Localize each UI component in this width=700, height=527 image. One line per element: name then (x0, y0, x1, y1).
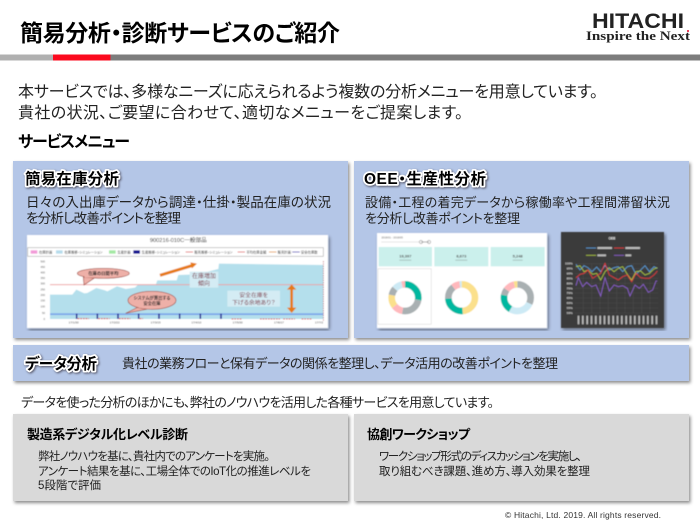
y axis labels: 300 (41, 282, 46, 286)
x axis labels: 17/4/10 (191, 321, 202, 325)
label: rising stock: 在庫増加 (192, 272, 216, 280)
logo: Hitachi (586, 10, 691, 43)
description: workshop: 取り組むべき課題、進め方、導入効果を整理 (379, 464, 590, 478)
label: rising stock (190, 272, 218, 288)
callout: safety stock: システムが算出する (134, 294, 170, 301)
y axis labels: 350 (41, 276, 46, 280)
x axis labels: 17/3/15 (151, 321, 161, 325)
safety stock line (50, 313, 323, 315)
description: data analysis: 貴社の業務フローと保有データの関係を整理し、データ活用の改善ポイントを整理 (122, 356, 558, 371)
average line (50, 283, 323, 286)
chart: OEE line chart: 100% (565, 262, 573, 266)
y axis labels: 50 (42, 311, 46, 315)
arrow: double headed (287, 284, 296, 313)
label: room to reduce safety stock: 安全在庫を (239, 291, 269, 299)
description: workshop (379, 449, 590, 478)
panel: co-creation workshop (354, 414, 689, 501)
description: OEE: を分析し改善ポイントを整理 (365, 211, 520, 226)
label: room to reduce safety stock: 下げる余地あり？ (232, 299, 275, 307)
x axis labels (69, 321, 323, 325)
y axis labels: 450 (41, 265, 46, 269)
chart legend: 販売推移・シミュレーション (194, 250, 233, 255)
y axis labels (41, 260, 46, 321)
copyright: © Hitachi, Ltd. 2019. All rights reserved. (505, 510, 661, 520)
area: inventory (50, 264, 323, 319)
label: room to reduce safety stock (227, 291, 280, 307)
chart legend: 平均在庫金額 (246, 250, 267, 255)
intro text: 貴社の状況、ご要望に合わせて、適切なメニューをご提案します。 (18, 104, 463, 122)
text: other services intro: データを使った分析のほかにも、弊社のノウハウを活用した各種サービスを用意しています。 (21, 395, 494, 410)
heading: data analysis: データ分析 (25, 354, 97, 373)
chart legend: 生産計画 (117, 250, 131, 255)
arrow: upward trend (160, 262, 197, 275)
date slider (381, 236, 431, 244)
series lines (576, 263, 657, 296)
callout: average stock: 在庫の日間平均 (88, 270, 119, 277)
sales marks (78, 317, 312, 320)
callout: safety stock: 安全在庫 (143, 300, 161, 307)
KPI cards: 5,248 (513, 253, 523, 258)
x axis labels: 17/6/17 (274, 321, 284, 325)
grid and axis (575, 264, 658, 313)
y axis labels: 250 (41, 287, 46, 291)
donut 2 (448, 284, 475, 311)
chart: OEE line chart: 90% (567, 272, 573, 276)
y axis labels: 150 (41, 299, 46, 303)
KPI cards (379, 247, 545, 266)
chart legend: 生産推移・シミュレーション (142, 250, 181, 255)
intro text: 本サービスでは、多様なニーズに応えられるよう複数の分析メニューを用意しています。 (18, 83, 598, 101)
chart legend: 在庫推移・シミュレーション (64, 250, 103, 255)
chart legend (586, 247, 640, 256)
y axis labels: 100 (41, 304, 46, 308)
panel: manufacturing digitalization level diagnosis (13, 414, 348, 501)
y axis labels: 400 (41, 271, 46, 275)
chart: OEE line chart: 95% (567, 267, 573, 271)
logo: Hitachi: HITACHI (592, 10, 684, 33)
heading: diagnosis: 製造系デジタル化レベル診断 (27, 427, 188, 442)
logo: Hitachi: Inspire the Next (586, 29, 691, 43)
chart: OEE line chart: 85% (567, 276, 573, 280)
title: 簡易分析・診断サービスのご紹介 (20, 20, 340, 46)
chart: OEE line chart: 55% (567, 306, 573, 310)
chart legend (28, 248, 323, 256)
production bars (77, 314, 221, 319)
description: inventory: 日々の入出庫データから調達・仕掛・製品在庫の状況 (26, 194, 332, 210)
selection frame (378, 269, 431, 324)
chart: OEE line chart: 80% (567, 281, 573, 285)
heading: workshop: 協創ワークショップ (367, 427, 471, 442)
chart: inventory area chart (27, 235, 328, 328)
description: diagnosis: 5段階で評価 (38, 478, 101, 492)
date slider: 2018/01 - 2018/05 (381, 236, 403, 240)
chart: OEE line chart (561, 232, 664, 328)
description: diagnosis: アンケート結果を基に、工場全体でのIoT化の推進レベルを (38, 464, 311, 478)
header rule (0, 54, 700, 60)
description: inventory (26, 194, 332, 226)
callout: safety stock (126, 291, 176, 313)
description: inventory: を分析し改善ポイントを整理 (26, 210, 182, 226)
chart title: OEE (608, 237, 616, 241)
KPI cards: 6,673 (456, 253, 467, 258)
intro text (18, 83, 598, 122)
chart: OEE line chart: 50% (567, 311, 573, 315)
chart legend: 販売計画 (278, 250, 292, 255)
panel: simple inventory analysis (13, 161, 348, 338)
chart legend: 在庫計画 (39, 250, 53, 255)
heading: simple inventory analysis: 簡易在庫分析 (25, 169, 119, 188)
description: OEE: 設備・工程の着完データから稼働率や工程間滞留状況 (365, 195, 670, 210)
y axis labels: 0 (44, 317, 46, 321)
donut 3 (504, 284, 531, 311)
x axis labels (578, 316, 657, 324)
heading: OEE: OEE・生産性分析 (364, 169, 486, 188)
donut 1 (392, 284, 418, 311)
KPI cards: 19,397 (399, 253, 412, 258)
dashboard: donut charts (377, 233, 547, 328)
description: diagnosis: 弊社ノウハウを基に、貴社内でのアンケートを実施。 (38, 449, 270, 463)
x axis labels: 17/5/30 (233, 321, 243, 325)
x axis labels: 17/2/22 (110, 321, 120, 325)
chart: OEE line chart: 70% (567, 291, 573, 295)
heading: service menu: サービスメニュー (18, 132, 130, 151)
description: diagnosis (38, 449, 311, 492)
chart legend: 安全在庫数 (301, 250, 318, 255)
y axis labels: 200 (41, 293, 46, 297)
description: OEE (365, 195, 670, 226)
y axis labels: 500 (41, 260, 46, 264)
x axis labels: 17/7/2 (315, 321, 323, 325)
panel: data analysis (13, 345, 689, 381)
description: workshop: ワークショップ形式のディスカッションを実施し、 (379, 449, 582, 463)
callout: average stock (77, 268, 129, 285)
chart title: 900216-010C一般部品 (150, 236, 207, 244)
chart: OEE line chart: 75% (567, 286, 573, 290)
panel: OEE and productivity analysis (354, 161, 689, 338)
chart: OEE line chart: 60% (567, 301, 573, 305)
chart: OEE line chart: 65% (567, 296, 573, 300)
x axis labels: 17/1/30 (69, 321, 79, 325)
label: rising stock: 傾向 (198, 280, 210, 288)
